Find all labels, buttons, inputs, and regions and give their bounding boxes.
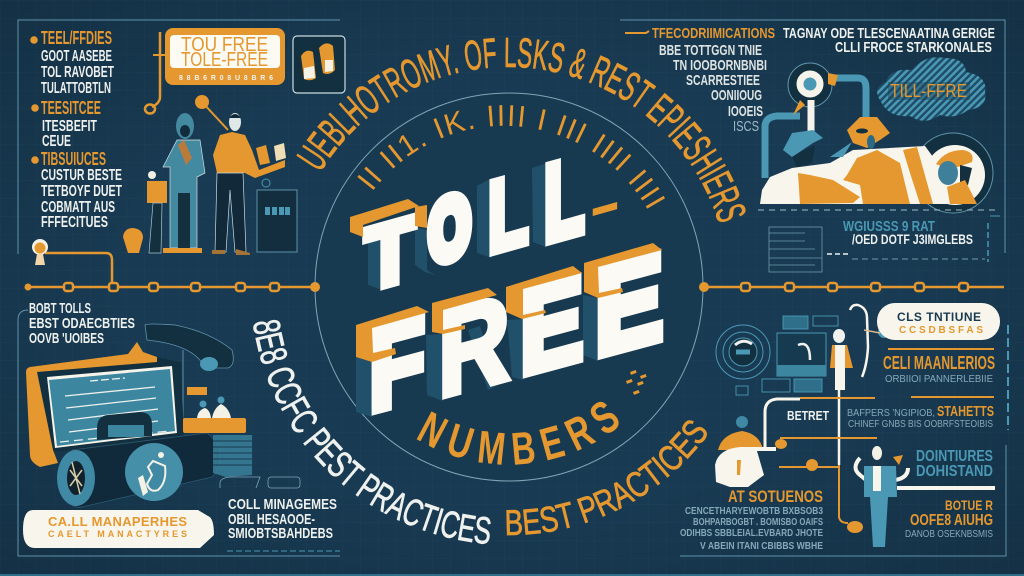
icon box: hands <box>293 36 345 93</box>
text block: first list: TOL RAVOBET <box>41 64 114 81</box>
word TOLL: O <box>429 177 470 282</box>
pill label <box>877 303 1000 340</box>
base dashes <box>758 209 1000 211</box>
label: call management: CA.LL MANAPERHES <box>48 514 187 529</box>
headset <box>145 324 233 420</box>
text: coll management: COLL MINAGEMES <box>228 496 337 513</box>
dashes <box>827 216 1000 262</box>
panel: bottom-left text: BOBT TOLLS <box>29 300 91 317</box>
text: at solutions: ODIHBS SBBLEIAL.EVBARD JHOTE <box>680 528 823 539</box>
word TOLL: T <box>365 199 415 310</box>
text: right aligned block: TN IOOBORNBNBI <box>673 57 767 74</box>
connector lines <box>765 325 1008 523</box>
curved text: white best practices: 8E8 CCFC PEST PRACTICES <box>253 320 491 544</box>
toll-free sign: 88B6R08U8BR6 <box>179 75 273 82</box>
text: teal heading: DOHISTAND <box>916 463 993 480</box>
curved text: orange best practices: BEST PRACTICES <box>506 420 707 536</box>
text: right mid callout: /OED DOTF J3IMGLEBS <box>852 231 973 247</box>
text: at solutions <box>680 487 823 552</box>
illustration: people group <box>123 95 297 255</box>
text: right aligned block: BBE TOTTGGN TNIE <box>659 42 762 59</box>
gear dial <box>716 325 770 379</box>
word FREE: E <box>595 227 663 383</box>
text block: second list <box>42 118 97 150</box>
figure: standing top centre <box>830 305 890 390</box>
text: right mid callout: WGIUSSS 9 RAT <box>843 218 935 235</box>
left head <box>783 130 823 167</box>
text: at solutions: BOHPARBOGBT . BOMISBO OAIFS <box>693 517 823 528</box>
bag <box>97 412 152 440</box>
bullet icons <box>30 36 39 164</box>
text block: third list <box>41 167 122 231</box>
label: call management: CAELT MANACTYRES <box>48 529 187 539</box>
toll-free sign <box>145 28 285 114</box>
panel: top-right text <box>625 25 995 135</box>
figure: seated person <box>715 416 776 487</box>
timeline right <box>699 282 1004 292</box>
ellipse with pattern <box>57 450 95 506</box>
illustration: computer and headset <box>26 324 300 507</box>
right circle <box>913 133 993 213</box>
central circle <box>315 93 703 481</box>
figure: orange person <box>212 113 286 255</box>
text: coll management <box>228 496 337 542</box>
text block: second list: ITESBEFIT <box>42 118 97 135</box>
text: right header lines <box>783 25 995 56</box>
heading: teesitcee: TEESITCEE <box>41 98 101 118</box>
text: right aligned block <box>659 42 767 135</box>
text: right aligned block: ISCS <box>733 118 759 135</box>
heading: toll-frees: TEEL/FFDIES <box>41 28 112 48</box>
word TOLL: L <box>488 152 528 275</box>
toll-free sign: TOU FREE <box>181 34 268 56</box>
word FREE: R <box>438 268 510 425</box>
panel: bottom-left text: OOVB 'UOIBES <box>29 330 104 347</box>
title: toll-free 3D letters <box>350 134 663 437</box>
figure: small orange <box>123 228 143 253</box>
text: orange heading lower right: DANOB OSEKNBSMIS <box>905 529 993 540</box>
figure: standing right <box>856 446 908 547</box>
pill label: CLS TNTIUNE <box>897 310 981 324</box>
word FREE: F <box>369 293 425 437</box>
text: statements: CHINEF GNBS BIS OOBRFSTEOIBIS <box>848 419 993 430</box>
cloud: toll-free <box>877 57 985 121</box>
panel: bottom-left text: EBST ODAECBTIES <box>29 315 135 332</box>
text: statements <box>847 403 994 430</box>
monitor <box>777 333 826 376</box>
text: statements: STAHETTS <box>937 403 994 420</box>
text block: third list: COBMATT AUS <box>41 199 115 216</box>
panel: bottom-left text <box>29 300 135 347</box>
text: teal heading: DOINTIURES <box>916 448 993 465</box>
text: right aligned block: SCARRESTIEE <box>686 72 760 89</box>
text: right aligned block: OONIIOUG <box>711 87 762 104</box>
teal stack <box>213 435 252 477</box>
text block: first list: TULATTOBTLN <box>41 80 111 97</box>
text block: first list <box>41 48 114 97</box>
cloud: toll-free: TILL-FFRE <box>890 81 967 101</box>
text block: first list: GOOT AASEBE <box>41 48 112 65</box>
icon: bulb <box>32 239 48 265</box>
text: coll management: SMIOBTSBAHDEBS <box>228 525 333 542</box>
text: orange heading lower right: BOTUE R <box>945 497 993 513</box>
table wireframe <box>769 227 822 272</box>
text: at solutions: V ABEIN ITANI CBIBBS WBHE <box>700 541 823 552</box>
small people on pedestal <box>183 387 246 433</box>
screen bezel <box>37 356 184 452</box>
word TOLL <box>365 134 584 310</box>
text: right aligned block: IOOEIS <box>728 103 763 120</box>
text: call managers <box>883 353 995 385</box>
label: call management <box>23 510 214 548</box>
text: orange heading lower right: OOFE8 AIUHG <box>910 512 993 529</box>
text: benefit label: BETRET <box>787 408 829 423</box>
center head <box>847 117 890 149</box>
heading: telecommunications: TFECODRIIMICATIONS <box>652 25 775 42</box>
screen lines <box>60 378 170 442</box>
side faces <box>356 163 598 417</box>
text: right mid callout <box>843 218 973 247</box>
text: teal heading <box>916 448 993 480</box>
circle icon: support agent <box>125 443 183 501</box>
word FREE <box>369 227 663 437</box>
panel: top-left text list <box>30 28 122 231</box>
timeline left <box>24 253 320 292</box>
icon: phone device <box>257 179 297 252</box>
orange bodies <box>798 173 860 204</box>
blue shoulder <box>830 142 852 157</box>
illustration: machine and screen <box>716 316 838 395</box>
text: call managers: ORBIIOI PANNERLEBIIE <box>885 374 993 385</box>
heading: tibsuiuces: TIBSUIUCES <box>41 149 106 169</box>
word FREE: E <box>520 251 583 401</box>
text block: second list: CEUE <box>42 133 71 150</box>
text: orange heading lower right <box>905 497 993 540</box>
connector line with dot <box>195 95 228 130</box>
top faces <box>350 199 662 362</box>
word TOLL: L <box>544 134 584 266</box>
figure: child <box>147 171 167 253</box>
white body shape <box>760 146 955 204</box>
text: at solutions: AT SOTUENOS <box>728 487 823 506</box>
text: coll management: OBIL HESAOOE- <box>228 511 315 528</box>
figure: teal person <box>163 113 205 253</box>
text: at solutions: CENCETHARYEWOBTB BXBSOB3 <box>685 506 823 517</box>
text block: third list: TETBOYF DUET <box>41 183 122 200</box>
toll-free sign: TOLE-FREE <box>181 49 268 71</box>
text block: third list: CUSTUR BESTE <box>41 167 122 184</box>
pill label: CCSDBSFAS <box>899 325 983 336</box>
decorative dots <box>626 370 647 395</box>
text block: third list: FFFECITUES <box>41 214 108 231</box>
text: statements: BAFPERS 'NGIPIOB, <box>847 408 935 419</box>
pipes and circle <box>765 63 866 178</box>
numbers arc heading: N U M B E R S <box>416 402 619 465</box>
right person <box>936 150 977 204</box>
laptop frame <box>26 342 157 467</box>
roller <box>64 433 220 507</box>
screen <box>47 366 177 448</box>
illustration: call agents <box>758 63 1000 213</box>
curved title: orange top arc: UEBLHOTROMY. OF LSKS & REST EPIESHIERS <box>296 38 746 222</box>
hyphen: - <box>589 167 621 242</box>
